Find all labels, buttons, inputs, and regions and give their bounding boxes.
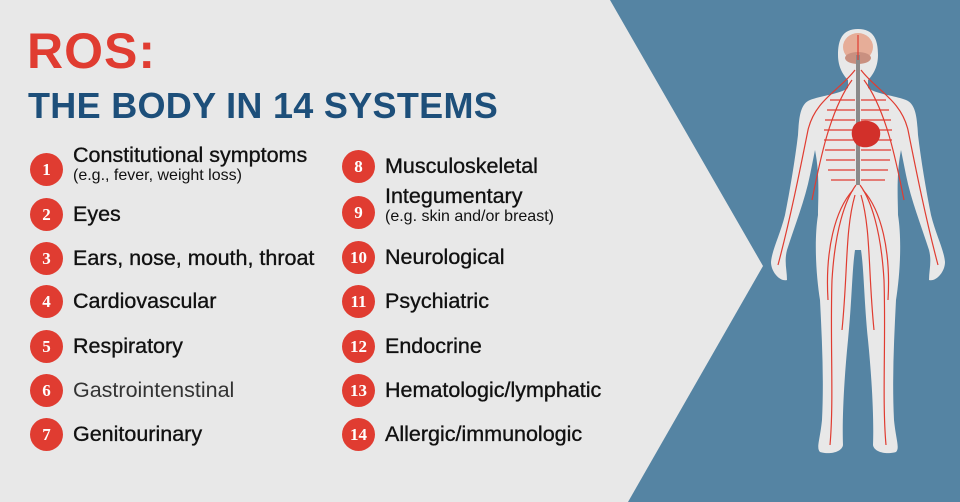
text: Endocrine	[385, 334, 482, 358]
text: Eyes	[73, 202, 121, 226]
text: (e.g., fever, weight loss)	[73, 167, 242, 184]
text: Cardiovascular	[73, 289, 216, 313]
item 8	[342, 150, 538, 183]
text: Psychiatric	[385, 289, 489, 313]
item 12	[342, 330, 482, 363]
text: 5	[42, 337, 51, 356]
subtitle: THE BODY IN 14 SYSTEMS	[28, 85, 498, 126]
text: 6	[42, 381, 51, 400]
item 6	[30, 374, 234, 407]
text: 7	[42, 425, 51, 444]
text: 8	[354, 157, 363, 176]
text: Hematologic/lymphatic	[385, 378, 601, 402]
item 3	[30, 242, 314, 275]
text: Genitourinary	[73, 422, 202, 446]
text: Integumentary	[385, 184, 522, 208]
text: 4	[42, 292, 51, 311]
text: 2	[42, 205, 51, 224]
text: 12	[350, 337, 367, 356]
title: ROS:	[27, 23, 156, 79]
text: Allergic/immunologic	[385, 422, 582, 446]
item 5	[30, 330, 183, 363]
text: Gastrointenstinal	[73, 378, 234, 402]
item 11	[342, 285, 489, 318]
item 2	[30, 198, 121, 231]
text: 9	[354, 203, 363, 222]
text: Constitutional symptoms	[73, 143, 307, 167]
item 14	[342, 418, 582, 451]
item 1	[30, 143, 307, 186]
item 13	[342, 374, 601, 407]
text: Neurological	[385, 245, 505, 269]
text: Musculoskeletal	[385, 154, 538, 178]
text: 13	[350, 381, 367, 400]
text: 14	[350, 425, 367, 444]
text: 3	[42, 249, 51, 268]
item 9	[342, 184, 554, 229]
text: 11	[350, 292, 367, 311]
text: 10	[350, 248, 367, 267]
text: 1	[42, 160, 51, 179]
text: (e.g. skin and/or breast)	[385, 208, 554, 225]
item 10	[342, 241, 505, 274]
item 4	[30, 285, 216, 318]
text: Respiratory	[73, 334, 183, 358]
text: Ears, nose, mouth, throat	[73, 246, 314, 270]
item 7	[30, 418, 202, 451]
